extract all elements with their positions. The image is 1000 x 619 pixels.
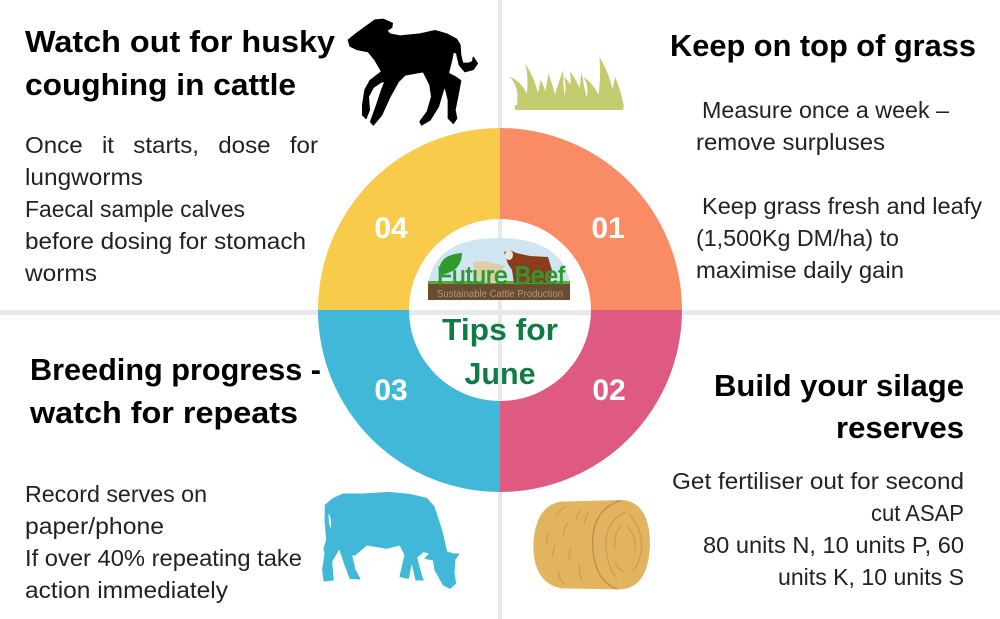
body text bbox=[24, 132, 318, 286]
heading: coughing in cattle bbox=[25, 67, 296, 102]
heading: Watch out for husky bbox=[25, 24, 336, 59]
heading bbox=[29, 352, 321, 430]
number 02: 02 bbox=[592, 374, 626, 407]
center title: Tips for bbox=[442, 312, 558, 347]
body text: Measure once a week – bbox=[702, 97, 949, 123]
calf in logo bbox=[473, 261, 505, 283]
body text: Faecal sample calves bbox=[25, 196, 245, 222]
center title bbox=[442, 312, 558, 391]
heading: Build your silage bbox=[714, 368, 964, 403]
logo: Future Beef bbox=[428, 238, 570, 300]
body text: Once it starts, dose for bbox=[25, 132, 318, 158]
body text: (1,500Kg DM/ha) to bbox=[696, 225, 899, 251]
body text: Keep grass fresh and leafy bbox=[702, 193, 983, 219]
panel: breeding progress bbox=[25, 352, 321, 603]
icon: hay bale bbox=[533, 500, 650, 589]
body text: cut ASAP bbox=[871, 500, 964, 526]
center title: June bbox=[464, 356, 536, 391]
body text: If over 40% repeating take bbox=[25, 545, 302, 571]
icon: calf silhouette bbox=[348, 19, 477, 125]
number 04: 04 bbox=[374, 212, 408, 245]
body text: 80 units N, 10 units P, 60 bbox=[703, 532, 964, 558]
body text: units K, 10 units S bbox=[778, 564, 964, 590]
body text: maximise daily gain bbox=[696, 257, 904, 283]
heading bbox=[714, 368, 964, 445]
icon: cow silhouette bbox=[323, 492, 459, 588]
body text bbox=[672, 468, 964, 590]
heading bbox=[25, 24, 336, 102]
panel: silage reserves bbox=[672, 368, 964, 590]
body text: remove surpluses bbox=[696, 129, 885, 155]
heading: Breeding progress - bbox=[30, 352, 321, 387]
body text: lungworms bbox=[25, 164, 143, 190]
donut chart bbox=[318, 128, 682, 492]
body text: before dosing for stomach bbox=[25, 228, 306, 254]
cow in logo bbox=[504, 250, 552, 283]
panel: grass bbox=[670, 28, 983, 283]
body text bbox=[25, 481, 302, 603]
heading: watch for repeats bbox=[29, 395, 298, 430]
body text: worms bbox=[24, 260, 97, 286]
number 03: 03 bbox=[374, 374, 408, 407]
body text: action immediately bbox=[25, 577, 229, 603]
logo: Future Beef: Future Beef bbox=[437, 262, 565, 290]
number 01: 01 bbox=[591, 212, 625, 245]
body text: paper/phone bbox=[25, 513, 164, 539]
heading: reserves bbox=[836, 410, 964, 445]
body text: Get fertiliser out for second bbox=[672, 468, 964, 494]
body text bbox=[696, 97, 983, 283]
body text: Record serves on bbox=[25, 481, 207, 507]
logo: Future Beef: Sustainable Cattle Production bbox=[437, 289, 563, 300]
panel: husky coughing bbox=[24, 24, 336, 286]
heading: Keep on top of grass bbox=[670, 28, 976, 63]
icon: grass bbox=[509, 57, 624, 110]
